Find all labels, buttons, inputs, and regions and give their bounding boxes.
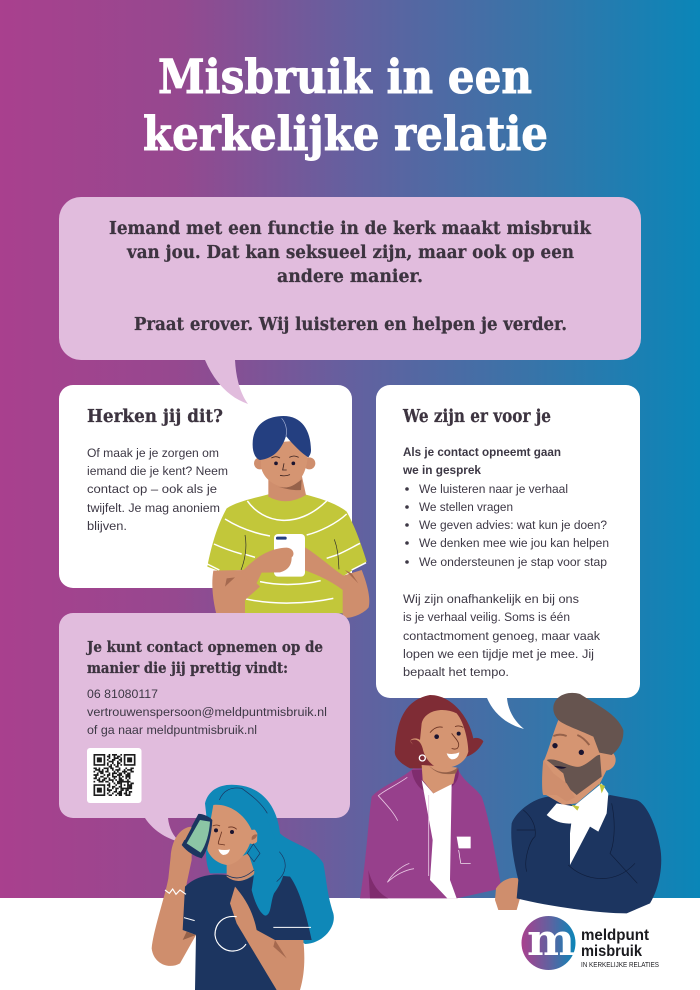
title: kerkelijke relatie bbox=[143, 107, 548, 162]
illustration: man with phone bbox=[207, 416, 369, 627]
contact details: of ga naar meldpuntmisbruik.nl bbox=[87, 723, 257, 737]
white footer band bbox=[0, 898, 700, 990]
paragraph bbox=[403, 592, 601, 679]
logo wordmark: IN KERKELIJKE RELATIES bbox=[581, 960, 659, 969]
paragraph: bepaalt het tempo. bbox=[403, 665, 509, 679]
contact heading: Je kunt contact opnemen op de bbox=[85, 639, 323, 656]
logo mark: m bbox=[527, 915, 575, 966]
bold intro line: we in gesprek bbox=[402, 463, 481, 477]
title bbox=[143, 50, 548, 162]
herken body text: blijven. bbox=[87, 519, 127, 533]
intro text: Praat erover. Wij luisteren en helpen je verder. bbox=[134, 315, 567, 335]
intro text: Iemand met een functie in de kerk maakt misbruik bbox=[109, 219, 592, 239]
contact details: vertrouwenspersoon@meldpuntmisbruik.nl bbox=[87, 705, 327, 719]
paragraph: is je verhaal veilig. Soms is één bbox=[403, 610, 570, 624]
herken body text: Of maak je je zorgen om bbox=[87, 446, 219, 460]
paragraph: contactmoment genoeg, maar vaak bbox=[403, 629, 601, 643]
herken body text: twijfelt. Je mag anoniem bbox=[87, 501, 220, 515]
logo wordmark bbox=[581, 927, 659, 969]
contact details bbox=[87, 687, 327, 737]
bullet list: We luisteren naar je verhaal bbox=[419, 482, 568, 496]
illustration: woman on the phone bbox=[152, 785, 334, 990]
intro text: andere manier. bbox=[277, 267, 423, 287]
contact heading bbox=[85, 639, 323, 677]
bullet list: We ondersteunen je stap voor stap bbox=[419, 555, 607, 569]
logo bbox=[522, 915, 659, 970]
bullet list bbox=[405, 482, 609, 569]
paragraph: Wij zijn onafhankelijk en bij ons bbox=[403, 592, 579, 606]
heading: herken jij dit: Herken jij dit? bbox=[87, 407, 223, 427]
heading: we zijn er voor je: We zijn er voor je bbox=[402, 407, 551, 427]
bullet list: We denken mee wie jou kan helpen bbox=[419, 536, 609, 550]
intro text: van jou. Dat kan seksueel zijn, maar ook op een bbox=[126, 243, 574, 263]
panel: herken jij dit bbox=[59, 385, 352, 588]
logo wordmark: misbruik bbox=[581, 943, 642, 960]
herken body text: contact op – ook als je bbox=[87, 482, 217, 496]
panel: contact bbox=[59, 613, 350, 842]
paragraph: lopen we een tijdje met je mee. Jij bbox=[403, 647, 594, 661]
illustration: woman listening bbox=[360, 695, 502, 898]
panel: we zijn er voor je bbox=[376, 385, 640, 729]
panel: intro speech bubble bbox=[59, 197, 641, 404]
contact heading: manier die jij prettig vindt: bbox=[87, 660, 288, 677]
illustration: man with beard bbox=[495, 693, 661, 913]
QR code bbox=[87, 748, 142, 803]
herken body text: iemand die je kent? Neem bbox=[87, 464, 228, 478]
bullet list: We geven advies: wat kun je doen? bbox=[419, 518, 607, 532]
logo wordmark: meldpunt bbox=[581, 927, 650, 944]
bold intro line: Als je contact opneemt gaan bbox=[403, 445, 561, 459]
title: Misbruik in een bbox=[158, 50, 532, 105]
intro text bbox=[109, 219, 592, 335]
contact details: 06 81080117 bbox=[87, 687, 158, 701]
bullet list: We stellen vragen bbox=[419, 500, 513, 514]
bold intro line bbox=[402, 445, 561, 477]
herken body text bbox=[87, 446, 228, 533]
